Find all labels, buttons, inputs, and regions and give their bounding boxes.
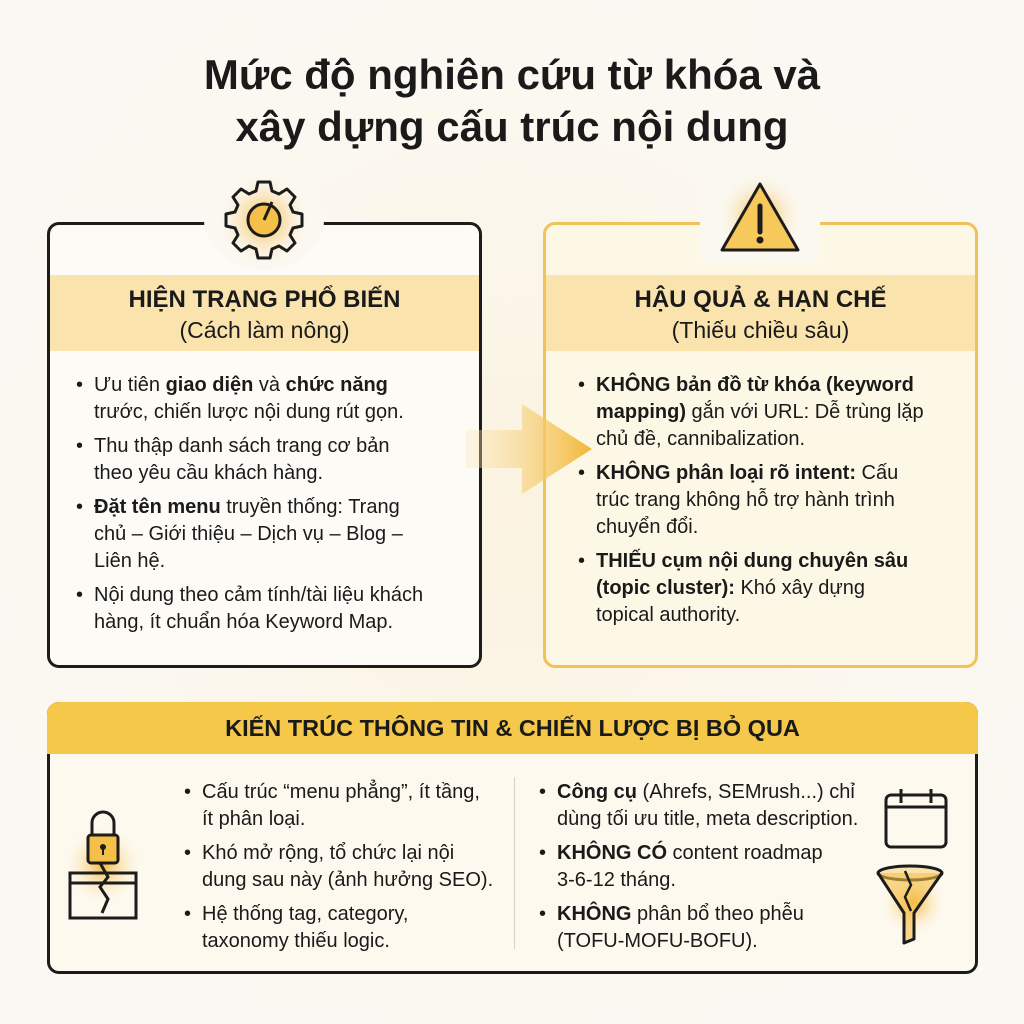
- header: consequences: HẬU QUẢ & HẠN CHẾ: [634, 286, 886, 313]
- bullet list: consequences: topical authority.: [596, 604, 740, 626]
- bullet list: current state: Liên hệ.: [94, 550, 165, 572]
- bullet list: bottom right: Công cụ (Ahrefs, SEMrush...) chỉ: [557, 781, 855, 803]
- title: [204, 51, 820, 150]
- bullet list: bottom left: Cấu trúc “menu phẳng”, ít tầng,: [202, 781, 480, 803]
- bullet list: bottom right: [540, 781, 858, 952]
- bullet list: consequences: chuyển đổi.: [596, 516, 698, 538]
- bullet list: bottom left: taxonomy thiếu logic.: [202, 930, 390, 952]
- icon: lock and box: [68, 810, 138, 920]
- bullet list: consequences: chủ đề, cannibalization.: [596, 428, 805, 450]
- header: bottom: [47, 702, 978, 754]
- header: current state: (Cách làm nông): [179, 317, 350, 343]
- bullet list: current state: Đặt tên menu truyền thống: Trang: [94, 496, 400, 518]
- bullet list: bottom right: 3-6-12 tháng.: [557, 869, 676, 891]
- title: Mức độ nghiên cứu từ khóa và: [204, 51, 820, 98]
- bullet list: bottom left: [184, 780, 493, 952]
- arrow: [466, 404, 592, 494]
- bullet list: bottom left: ít phân loại.: [202, 808, 305, 830]
- panel: consequences: [543, 222, 978, 668]
- bullet list: current state: chủ – Giới thiệu – Dịch vụ – Blog –: [94, 523, 403, 545]
- bullet list: consequences: (topic cluster): Khó xây dựng: [596, 577, 865, 599]
- bullet list: current state: Thu thập danh sách trang cơ bản: [94, 435, 390, 457]
- bullet list: bottom right: dùng tối ưu title, meta description.: [557, 808, 858, 830]
- bullet list: current state: [76, 374, 423, 633]
- header: consequences: [546, 275, 975, 351]
- bullet list: current state: Nội dung theo cảm tính/tài liệu khách: [94, 584, 423, 606]
- panel: current state: [47, 222, 482, 668]
- bullet list: bottom left: dung sau này (ảnh hưởng SEO).: [202, 869, 493, 891]
- bullet list: bottom right: KHÔNG CÓ content roadmap: [557, 842, 823, 864]
- bullet list: consequences: KHÔNG phân loại rõ intent: Cấu: [596, 462, 898, 484]
- bullet list: bottom right: KHÔNG phân bổ theo phễu: [557, 903, 804, 925]
- panel: bottom information architecture: [47, 702, 978, 974]
- bullet list: current state: theo yêu cầu khách hàng.: [94, 462, 323, 484]
- title: xây dựng cấu trúc nội dung: [235, 103, 789, 150]
- header: current state: HIỆN TRẠNG PHỔ BIẾN: [128, 286, 400, 313]
- icon: warning: [700, 170, 820, 262]
- header: current state: [50, 275, 479, 351]
- bullet list: bottom left: Khó mở rộng, tổ chức lại nội: [202, 842, 454, 864]
- icon: gear: [204, 170, 324, 270]
- bullet list: current state: Ưu tiên giao diện và chức năng: [94, 374, 388, 396]
- bullet list: consequences: trúc trang không hỗ trợ hành trình: [596, 489, 895, 511]
- bullet list: current state: trước, chiến lược nội dung rút gọn.: [94, 401, 404, 423]
- bullet list: current state: hàng, ít chuẩn hóa Keyword Map.: [94, 611, 393, 633]
- bullet list: bottom right: (TOFU-MOFU-BOFU).: [557, 930, 758, 952]
- bullet list: consequences: THIẾU cụm nội dung chuyên sâu: [596, 550, 908, 572]
- icon: broken funnel: [876, 864, 944, 944]
- icon: calendar: [884, 789, 948, 848]
- bullet list: consequences: KHÔNG bản đồ từ khóa (keyword: [596, 374, 914, 396]
- bullet list: consequences: [578, 372, 924, 626]
- bullet list: bottom left: Hệ thống tag, category,: [202, 903, 408, 925]
- header: bottom: KIẾN TRÚC THÔNG TIN & CHIẾN LƯỢC BỊ BỎ QUA: [225, 715, 800, 741]
- header: consequences: (Thiếu chiều sâu): [672, 317, 849, 343]
- bullet list: consequences: mapping) gắn với URL: Dễ trùng lặp: [596, 401, 924, 423]
